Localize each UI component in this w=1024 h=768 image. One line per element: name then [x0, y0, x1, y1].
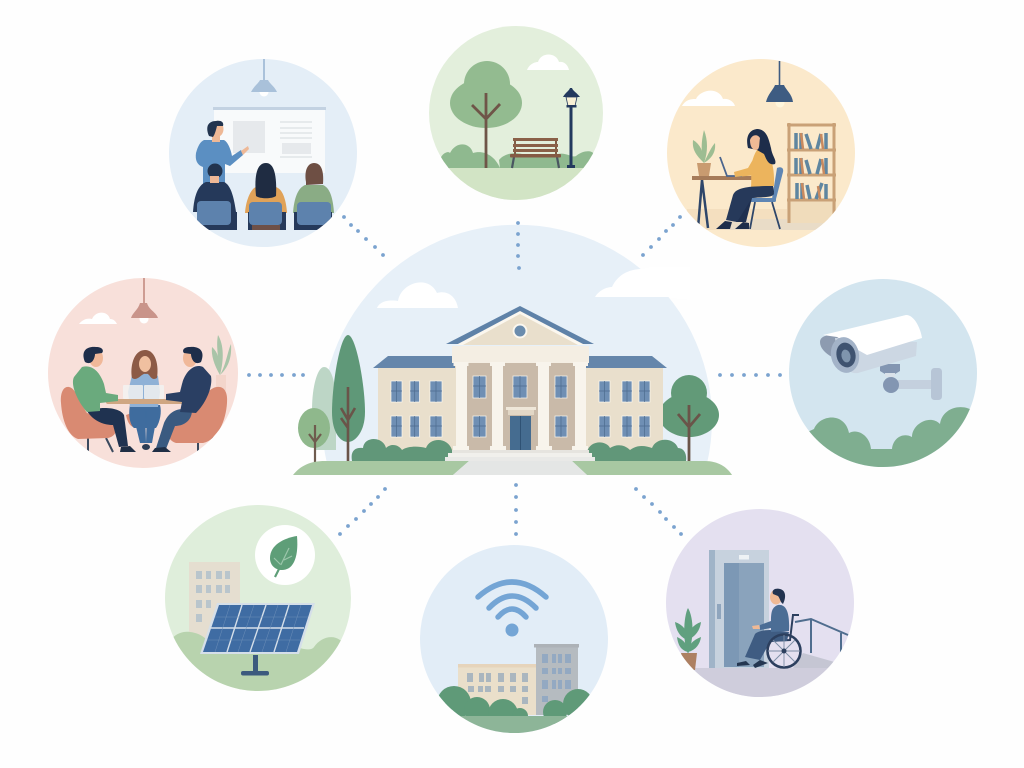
windows — [391, 376, 650, 437]
person in navy hoodie — [152, 347, 211, 452]
panel: park with bench — [429, 26, 604, 203]
tall cypress tree — [332, 335, 365, 461]
pediment — [446, 306, 594, 345]
left roof — [373, 356, 455, 368]
left wing — [378, 366, 456, 450]
right roof — [585, 356, 667, 368]
person in green hoodie — [73, 347, 136, 452]
bushes — [809, 407, 970, 467]
solar panel — [200, 603, 315, 676]
leaf badge — [255, 525, 315, 585]
ceiling lamp — [251, 59, 277, 96]
right lawn — [572, 461, 732, 475]
background building — [189, 562, 240, 640]
cloud — [682, 91, 735, 106]
table — [692, 176, 752, 228]
ground — [448, 168, 584, 200]
cloud left — [377, 282, 458, 308]
central campus building scene — [293, 225, 732, 475]
gray building — [534, 644, 579, 715]
tree — [450, 61, 522, 168]
dotted connectors — [247, 215, 782, 536]
plant — [675, 608, 701, 670]
potted plant — [693, 130, 715, 176]
laptop — [720, 157, 742, 176]
seated person dark — [193, 164, 237, 230]
panel: solar energy — [160, 505, 355, 700]
round tree right — [659, 375, 719, 461]
walkway — [453, 461, 587, 475]
right shrubs — [587, 440, 686, 461]
bookshelf — [787, 123, 836, 223]
left lawn — [293, 461, 469, 475]
handrail — [795, 619, 848, 653]
sky dome — [322, 225, 712, 475]
elevator — [709, 550, 769, 668]
presentation board — [213, 107, 326, 173]
panel: lecture classroom — [169, 59, 357, 247]
pendant lamp — [131, 278, 158, 324]
small tree — [298, 408, 330, 468]
panel: study room — [667, 59, 855, 247]
person in wheelchair — [737, 589, 800, 668]
bench — [510, 138, 561, 168]
green hills — [160, 632, 355, 700]
beige building — [458, 664, 538, 715]
shrubs — [439, 144, 596, 168]
laptops — [123, 385, 164, 399]
cloud — [527, 54, 569, 70]
chair — [750, 167, 783, 229]
housing — [835, 338, 917, 373]
sun hood — [823, 315, 922, 355]
wall mount — [880, 364, 942, 400]
steps — [445, 450, 595, 461]
panel: security camera — [789, 279, 980, 480]
left armchair — [61, 387, 116, 452]
entablature — [452, 346, 589, 363]
floor — [687, 209, 837, 230]
panel: accessible elevator — [666, 509, 856, 698]
wall plant — [212, 335, 231, 391]
camera — [820, 315, 942, 400]
panel: collaboration lounge — [48, 278, 238, 468]
shrubs — [432, 686, 600, 729]
seated person orange — [245, 163, 287, 230]
portico wall — [462, 360, 580, 450]
ground — [420, 716, 610, 736]
center chair and woman — [126, 350, 161, 450]
columns — [453, 362, 588, 450]
floor — [666, 668, 856, 698]
seated person green — [293, 163, 334, 230]
door — [506, 407, 536, 450]
ramp — [793, 653, 838, 668]
right armchair — [167, 387, 227, 452]
left shrubs — [352, 439, 452, 461]
light cypress — [312, 367, 336, 450]
cloud right — [595, 267, 690, 300]
pendant lamp — [766, 61, 793, 108]
table — [106, 399, 184, 404]
lens — [828, 334, 862, 376]
panel: campus wi-fi — [420, 545, 610, 736]
camera rear — [820, 335, 845, 357]
street lamp — [563, 88, 580, 168]
wifi icon — [478, 582, 546, 636]
presenter — [196, 121, 249, 190]
student at laptop — [716, 129, 775, 229]
window muntins — [391, 376, 650, 437]
cloud — [79, 313, 117, 324]
right wing — [585, 366, 663, 450]
